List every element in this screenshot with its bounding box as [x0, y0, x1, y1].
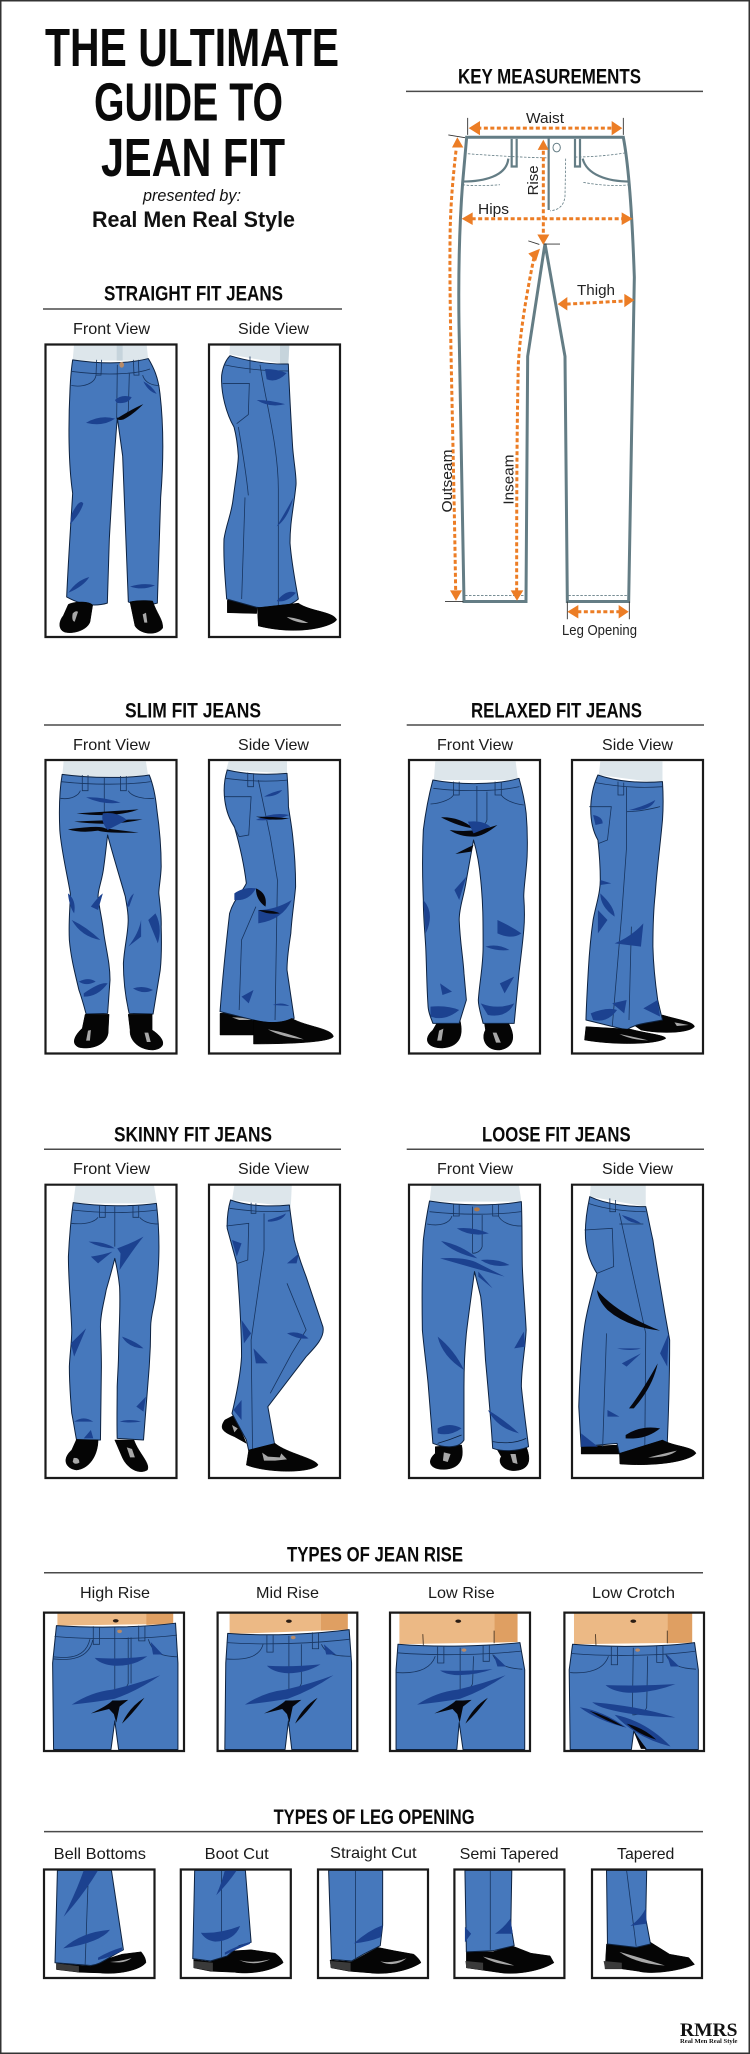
title block — [45, 18, 339, 232]
title block: GUIDE TO — [94, 72, 283, 132]
title block: THE ULTIMATE — [45, 18, 339, 78]
logo: RMRS: Real Men Real Style — [680, 2038, 738, 2045]
figure: relaxed front view — [423, 761, 527, 1050]
logo: RMRS: RMRS — [680, 2020, 738, 2041]
figure: slim side view — [220, 761, 333, 1044]
panel: relaxed fit jeans — [407, 699, 704, 1054]
frame: skinny front — [46, 1185, 176, 1478]
title block: JEAN FIT — [101, 128, 285, 188]
panel: loose fit jeans — [407, 1123, 704, 1478]
panel: slim fit jeans: Front View — [73, 737, 150, 754]
panel: types of jean rise: Mid Rise — [256, 1585, 319, 1602]
panel: straight fit jeans: STRAIGHT FIT JEANS — [104, 282, 283, 306]
frame: relaxed front — [409, 760, 540, 1054]
panel: skinny fit jeans: Front View — [73, 1161, 150, 1178]
panel: skinny fit jeans: Side View — [238, 1161, 309, 1178]
figure: low rise — [396, 1613, 525, 1750]
jeans measurement diagram — [445, 118, 634, 619]
figure: high rise — [53, 1613, 178, 1750]
panel: types of leg opening — [44, 1806, 703, 1978]
figure: straight front view — [60, 345, 163, 633]
panel: types of leg opening: Semi Tapered — [460, 1846, 559, 1863]
frame: bell bottoms — [44, 1870, 154, 1978]
figure: tapered — [604, 1870, 695, 1973]
panel: loose fit jeans: LOOSE FIT JEANS — [482, 1123, 631, 1146]
frame: semi tapered — [454, 1870, 564, 1978]
panel: straight fit jeans: Front View — [73, 321, 150, 338]
frame: slim front — [46, 760, 176, 1054]
panel: types of leg opening: Bell Bottoms — [54, 1846, 146, 1863]
title block: Real Men Real Style — [92, 207, 295, 232]
panel: key measurements: Inseam — [500, 455, 518, 505]
panel: skinny fit jeans — [44, 1123, 341, 1478]
figure: loose side view — [579, 1185, 696, 1465]
figure: skinny front view — [66, 1185, 159, 1472]
panel: loose fit jeans: Side View — [602, 1161, 673, 1178]
frame: low rise — [390, 1613, 530, 1751]
frame: loose side — [572, 1185, 703, 1478]
figure: mid rise — [225, 1613, 352, 1750]
panel: loose fit jeans: Front View — [437, 1161, 513, 1178]
frame: high rise — [44, 1613, 184, 1751]
figure: boot cut — [193, 1870, 283, 1973]
panel: key measurements: Outseam — [439, 450, 456, 512]
panel: types of leg opening: TYPES OF LEG OPENING — [274, 1806, 475, 1829]
figure: semi tapered — [465, 1870, 554, 1973]
title block: presented by: — [142, 186, 241, 205]
panel: key measurements: Leg Opening — [562, 622, 637, 639]
frame: loose front — [409, 1185, 540, 1478]
panel: types of jean rise: TYPES OF JEAN RISE — [287, 1544, 463, 1566]
figure: bell bottoms — [55, 1870, 146, 1973]
panel: types of leg opening: Tapered — [617, 1846, 674, 1863]
figure: loose front view — [422, 1185, 529, 1471]
panel: types of jean rise: High Rise — [80, 1585, 150, 1602]
panel: slim fit jeans — [44, 699, 341, 1054]
frame: relaxed side — [572, 760, 703, 1054]
panel: types of jean rise: Low Rise — [428, 1585, 495, 1602]
panel: key measurements: KEY MEASUREMENTS — [458, 66, 641, 88]
frame: mid rise — [218, 1613, 357, 1751]
panel: relaxed fit jeans: Side View — [602, 737, 673, 754]
panel: key measurements: Rise — [525, 165, 542, 195]
panel: slim fit jeans: SLIM FIT JEANS — [125, 699, 261, 722]
frame: slim side — [209, 760, 340, 1054]
frame: boot cut — [181, 1870, 291, 1978]
figure: straight cut — [329, 1870, 421, 1973]
panel: slim fit jeans: Side View — [238, 737, 309, 754]
panel: types of jean rise: Low Crotch — [592, 1585, 675, 1602]
panel: types of jean rise — [44, 1544, 704, 1751]
figure: low crotch — [569, 1613, 698, 1750]
figure: straight side view — [222, 345, 337, 630]
panel: key measurements: Hips — [478, 201, 509, 218]
panel: key measurements — [406, 66, 703, 639]
panel: straight fit jeans — [43, 282, 342, 637]
panel: straight fit jeans: Side View — [238, 321, 309, 338]
panel: relaxed fit jeans: Front View — [437, 737, 513, 754]
frame: straight side — [209, 344, 340, 637]
figure: slim front view — [59, 761, 163, 1050]
frame: straight cut — [318, 1870, 428, 1978]
figure: relaxed side view — [585, 761, 695, 1044]
figure: skinny side view — [222, 1185, 323, 1471]
frame: skinny side — [209, 1185, 340, 1478]
panel: types of leg opening: Boot Cut — [205, 1846, 269, 1863]
panel: key measurements: Thigh — [577, 282, 615, 299]
frame: straight front — [46, 344, 176, 637]
panel: skinny fit jeans: SKINNY FIT JEANS — [114, 1123, 272, 1146]
frame: low crotch — [564, 1613, 704, 1751]
panel: types of leg opening: Straight Cut — [330, 1845, 417, 1862]
panel: key measurements: Waist — [526, 110, 565, 127]
panel: relaxed fit jeans: RELAXED FIT JEANS — [471, 699, 642, 722]
frame: tapered — [592, 1870, 702, 1978]
